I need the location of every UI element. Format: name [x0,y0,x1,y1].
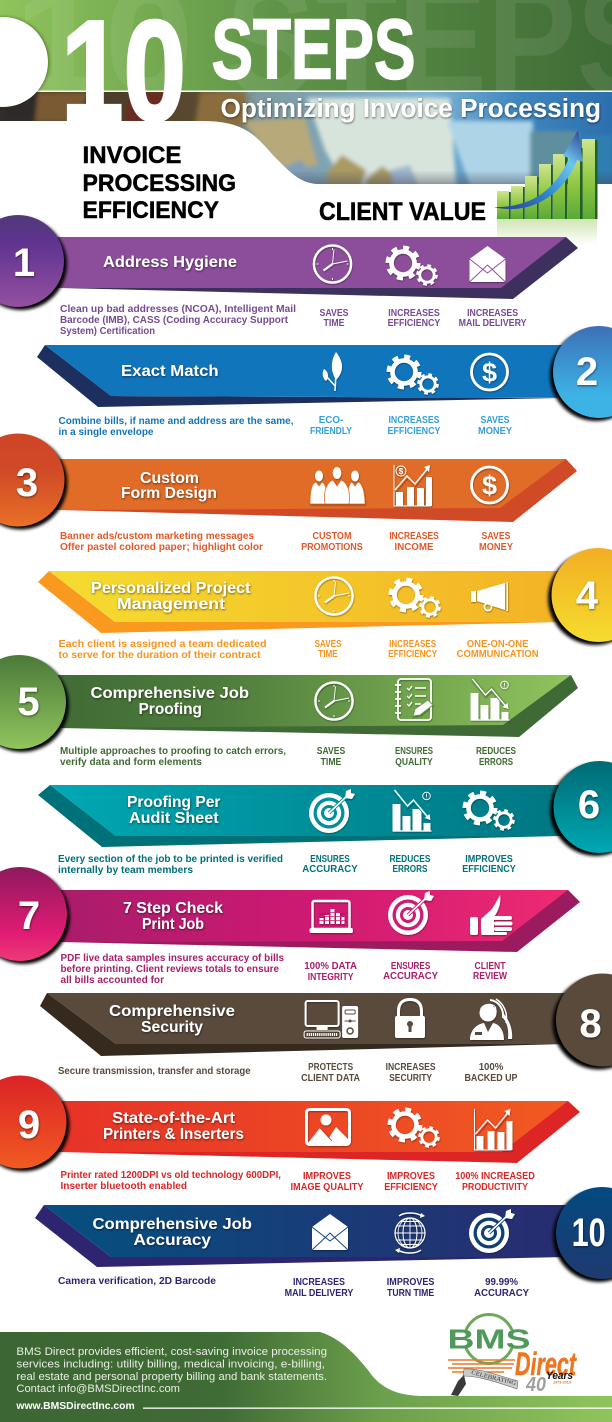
number badge 3 [0,434,68,530]
icon: support person [470,999,512,1040]
step 5 title: Comprehensive Job [90,685,249,702]
band 7 [30,890,580,952]
step 4 title: Personalized Project [91,580,251,597]
step 6 description: internally by team members [58,865,193,876]
value label: 99.99% accuracy [474,1277,529,1299]
band 10 [35,1205,590,1267]
icon: dollar: $ [482,358,497,388]
step 10 title: Accuracy [134,1232,211,1249]
value label: increases efficiency: EFFICIENCY [388,649,437,660]
value label: saves time [320,308,349,329]
icon: clock [315,577,353,615]
step 3 title: Form Design [121,485,217,502]
icon: gears [389,357,438,394]
step 9 title: Printers & Inserters [103,1126,244,1143]
step 8 description: Secure transmission, transfer and storage [58,1066,251,1077]
step 6 title: Audit Sheet [129,810,219,827]
number badge 7 [0,867,70,964]
value label: improves turn time: IMPROVES [387,1277,435,1288]
value label: increases security: INCREASES [386,1062,436,1073]
value label: ensures quality: QUALITY [395,757,433,768]
step 7 description: all bills accounted for [60,975,164,986]
step 2 description [58,416,294,438]
band 8 [40,993,590,1056]
subtitle: Optimizing Invoice Processing [220,95,601,123]
step 1 description [60,304,296,337]
value label: saves money: MONEY [479,542,513,553]
value label: increases mail delivery [459,308,527,329]
step 3 description: Banner ads/custom marketing messages [60,531,254,542]
step 1 description: System) Certification [60,326,155,337]
step 2 description: in a single envelope [58,427,154,438]
band 9 [30,1101,580,1163]
value label: reduces errors: REDUCES [476,746,516,757]
value label: custom promotions: PROMOTIONS [301,542,363,553]
value label: custom promotions: CUSTOM [312,531,352,542]
icon: envelope [312,1214,348,1250]
value label: one-on-one communication: COMMUNICATION [457,649,539,660]
step 6 title [127,794,220,827]
icon: megaphone [471,582,508,611]
icon: envelope [470,246,506,282]
icon: people [310,467,365,504]
step 3 title: Custom [140,470,199,487]
step 8 title [109,1003,235,1036]
value label: eco-friendly: ECO- [319,415,343,426]
icon: clock [314,245,351,283]
value label: increases mail delivery: INCREASES [467,308,518,319]
value label: increases security: SECURITY [389,1073,432,1084]
value label: ensures quality: ENSURES [395,746,433,757]
icon: rising bar chart [494,130,598,245]
icon: target [469,1209,515,1253]
panel: step 4 [38,548,612,661]
heading: invoice processing efficiency: INVOICE [82,142,182,169]
icon: reduced errors chart [392,790,432,831]
number badge 8 [552,974,612,1070]
value label: increases efficiency [388,639,437,660]
value label: improves efficiency: EFFICIENCY [384,1182,438,1193]
value label: increases income [389,531,439,553]
logo: BMS Direct [448,1314,577,1396]
value label: eco-friendly [310,415,352,437]
value label: ensures accuracy [383,961,438,982]
value label: improves image quality: IMAGE QUALITY [290,1182,364,1193]
step 2 description: Combine bills, if name and address are the same, [58,416,294,427]
value label: increases income: INCOME [394,542,434,553]
icon: laptop [310,901,353,933]
step 8 title: Security [141,1019,203,1036]
number badge 5 [0,655,69,752]
band 4 [38,571,590,633]
number badge 9 [0,1076,70,1172]
value label: increases mail delivery: MAIL DELIVERY [285,1288,354,1299]
value label: improves efficiency [384,1171,438,1193]
value label: saves time [317,746,345,768]
number badge 9: 9 [18,1103,40,1147]
panel: step 6 [38,761,612,876]
step 5 description: verify data and form elements [60,757,202,768]
value label: saves money: SAVES [480,415,510,426]
step 4 description: to serve for the duration of their contract [58,650,261,661]
step 5 title: Proofing [138,701,202,718]
number badge 2 [550,326,612,421]
value label: 100% increased productivity: PRODUCTIVITY [462,1182,528,1193]
footer text: BMS Direct provides efficient, cost-saving invoice processing [16,1346,327,1358]
value label: ensures quality [395,746,433,768]
number badge 1: 1 [13,241,35,285]
step 1 description: Barcode (IMB), CASS (Coding Accuracy Support [60,315,289,326]
value label: increases efficiency [388,415,441,437]
value label: ensures accuracy: ACCURACY [302,864,358,875]
panel: step 3 [0,434,577,553]
value label: increases efficiency: INCREASES [388,415,440,426]
logo: BMS Direct: BMS [448,1324,530,1354]
value label: improves efficiency: IMPROVES [387,1171,435,1182]
step 7 title: Print Job [142,916,204,933]
icon: computer [304,1001,358,1038]
value label: 100% increased productivity [455,1171,535,1193]
icon: picture [306,1110,350,1144]
step 1 description: Clean up bad addresses (NCOA), Intelligent Mail [60,304,296,315]
step 5 title [90,685,249,718]
icon: target [309,789,355,833]
value label: increases mail delivery [285,1277,354,1299]
value label: protects client data: PROTECTS [308,1062,353,1073]
value label: client review: CLIENT [474,961,506,972]
icon: thumbs up [470,895,512,935]
step 4 description [58,639,266,661]
band 6 [38,785,590,847]
value label: increases efficiency: INCREASES [388,308,440,319]
value label: increases efficiency [388,308,441,329]
icon: padlock [395,1000,425,1038]
step 9 title: State-of-the-Art [112,1110,235,1127]
value label: 99.99% accuracy: 99.99% [485,1277,518,1288]
value label: saves money: SAVES [482,531,511,542]
step 10 title: Comprehensive Job [92,1216,252,1233]
step 7 description: PDF live data samples insures accuracy of bills [60,953,284,964]
icon: globe [395,1213,425,1253]
panel: step 8 [40,974,612,1084]
icon: dollar [472,354,508,390]
value label: 100% backed up: BACKED UP [464,1073,518,1084]
header photo [0,92,612,190]
value label: saves money: MONEY [478,426,512,437]
value label: saves time: SAVES [314,639,342,650]
heading: STEPS: STEPS [212,2,416,98]
value label: saves time: SAVES [320,308,349,319]
icon: income chart [394,465,432,506]
value label: 100% data integrity: INTEGRITY [308,972,354,983]
white bar under green [0,90,612,92]
panel: step 1 [0,215,578,337]
value label: protects client data [301,1062,361,1084]
value label: one-on-one communication: ONE-ON-ONE [467,639,529,650]
step 1 title: Address Hygiene [103,254,237,271]
logo: BMS Direct: CELEBRATING [471,1370,517,1387]
panel: step 10 [35,1187,612,1299]
band 2 [37,345,590,407]
value label: 99.99% accuracy: ACCURACY [474,1288,529,1299]
heading: invoice processing efficiency: EFFICIENCY [82,197,219,224]
value label: increases income: INCREASES [389,531,439,542]
value label: custom promotions [301,531,363,553]
value label: reduces errors: ERRORS [479,757,513,768]
value label: improves efficiency: EFFICIENCY [462,864,516,875]
step 3 title [121,470,217,502]
step 9 title [103,1110,244,1143]
panel: step 2 [37,326,612,438]
icon: gears [465,793,514,830]
heading: invoice processing efficiency [82,142,236,224]
value label: reduces errors: REDUCES [390,854,431,865]
value label: protects client data: CLIENT DATA [301,1073,361,1084]
value label: increases efficiency: EFFICIENCY [388,318,441,329]
value label: improves turn time [387,1277,435,1299]
footer text: services including: utility billing, medical invoicing, e-billing, [16,1359,325,1371]
value label: improves efficiency: IMPROVES [465,854,513,865]
number badge 6: 6 [578,783,600,827]
number badge 1 [0,215,67,310]
icon: target [388,891,434,935]
value label: reduces errors: ERRORS [392,864,428,875]
step 3 description: Offer pastel colored paper; highlight color [60,542,263,553]
green title band [0,0,612,90]
footer text: Contact info@BMSDirectInc.com [16,1383,180,1395]
value label: saves time: TIME [324,318,345,329]
footer text [16,1346,327,1395]
value label: ensures accuracy: ENSURES [310,854,350,865]
step 8 title: Comprehensive [109,1003,235,1020]
icon: clipboard [395,679,433,720]
logo: BMS Direct: 40 [525,1374,546,1396]
value label: saves time: TIME [318,649,338,660]
heading: client value: CLIENT VALUE [319,198,486,226]
value label: increases mail delivery: INCREASES [293,1277,345,1288]
icon: gears [390,1110,438,1146]
step 9 description: Inserter bluetooth enabled [60,1181,187,1192]
panel: footer [0,1314,612,1422]
value label: saves time: TIME [321,757,342,768]
step 6 title: Proofing Per [127,794,220,811]
value label: improves image quality: IMPROVES [303,1171,351,1182]
value label: increases efficiency: EFFICIENCY [388,426,441,437]
icon: clock [315,682,353,720]
number badge 5: 5 [17,680,40,724]
icon: gears [391,580,440,616]
step 4 description: Each client is assigned a team dedicated [58,639,266,650]
value label: saves money [478,415,512,437]
logo: BMS Direct: Years [546,1370,573,1382]
step 6 description [58,854,283,876]
step 5 description: Multiple approaches to proofing to catch errors, [60,746,286,757]
value label: client review: REVIEW [473,971,507,982]
value label: client review [473,961,507,982]
website: www.BMSDirectInc.com [15,1400,135,1412]
icon: dollar [472,467,508,503]
value label: eco-friendly: FRIENDLY [310,426,352,437]
value label: 100% increased productivity: 100% INCREASED [455,1171,535,1182]
step 2 title: Exact Match [121,363,219,380]
value label: saves time: SAVES [317,746,345,757]
step 10 description: Camera verification, 2D Barcode [58,1276,216,1287]
number badge 3: 3 [16,461,38,505]
panel: step 9 [0,1076,580,1193]
value label: saves time [314,639,342,660]
logo: BMS Direct: Direct [515,1346,577,1382]
footer background [0,1332,612,1422]
value label: increases mail delivery: MAIL DELIVERY [459,318,527,329]
value label: ensures accuracy: ENSURES [391,961,430,972]
step 7 title: 7 Step Check [123,900,223,917]
step 4 title: Management [117,596,225,613]
step 5 description [60,746,286,768]
number badge 4: 4 [576,574,599,618]
value label: increases security [386,1062,436,1084]
step 10 title [92,1216,252,1249]
panel: step 7 [0,867,580,986]
value label: one-on-one communication [457,639,539,660]
value label: ensures accuracy: ACCURACY [383,971,438,982]
step 6 description: Every section of the job to be printed is verified [58,854,283,865]
value label: increases efficiency: INCREASES [389,639,436,650]
step 9 description [60,1170,281,1192]
panel: header [0,0,612,245]
value label: 100% backed up [464,1062,518,1084]
band 5 [30,675,578,737]
number badge 8: 8 [579,1002,602,1046]
icon: reduced errors chart [470,679,510,720]
icon: dollar: $ [482,470,497,500]
logo: BMS Direct: 1973-2013 [553,1380,571,1384]
step 7 title [123,900,223,933]
value label: ensures accuracy [302,854,358,875]
icon: gears [388,248,436,284]
number badge 7: 7 [18,894,40,938]
value label: 100% data integrity: 100% DATA [304,961,358,972]
footer rule [143,1408,612,1409]
white half circle [0,17,49,107]
band 1 [30,237,578,299]
number badge 4 [548,548,612,645]
value label: improves image quality [290,1171,364,1193]
heading: invoice processing efficiency: PROCESSING [82,170,236,197]
value label: reduces errors [476,746,516,768]
value label: saves money [479,531,513,553]
number badge 6 [550,761,612,856]
panel: step 5 [0,655,578,768]
step 7 description [60,953,284,986]
step 9 description: Printer rated 1200DPI vs old technology 600DPI, [60,1170,281,1181]
icon: income chart: $ [399,467,404,476]
step 4 title [91,580,251,613]
value label: 100% backed up: 100% [479,1062,503,1073]
value label: improves turn time: TURN TIME [387,1288,434,1299]
step 3 description [60,531,263,553]
icon: productivity chart [474,1109,512,1150]
band 3 [30,459,577,522]
step 7 description: before printing. Client reviews totals to ensure [60,964,279,975]
value label: 100% data integrity [304,961,358,983]
value label: improves efficiency [462,854,516,875]
footer text: real estate and personal property billing and bank statements. [16,1371,327,1383]
value label: reduces errors [390,854,431,875]
number badge 2: 2 [576,350,598,394]
icon: leaf [323,352,342,391]
number badge 10 [553,1187,612,1282]
